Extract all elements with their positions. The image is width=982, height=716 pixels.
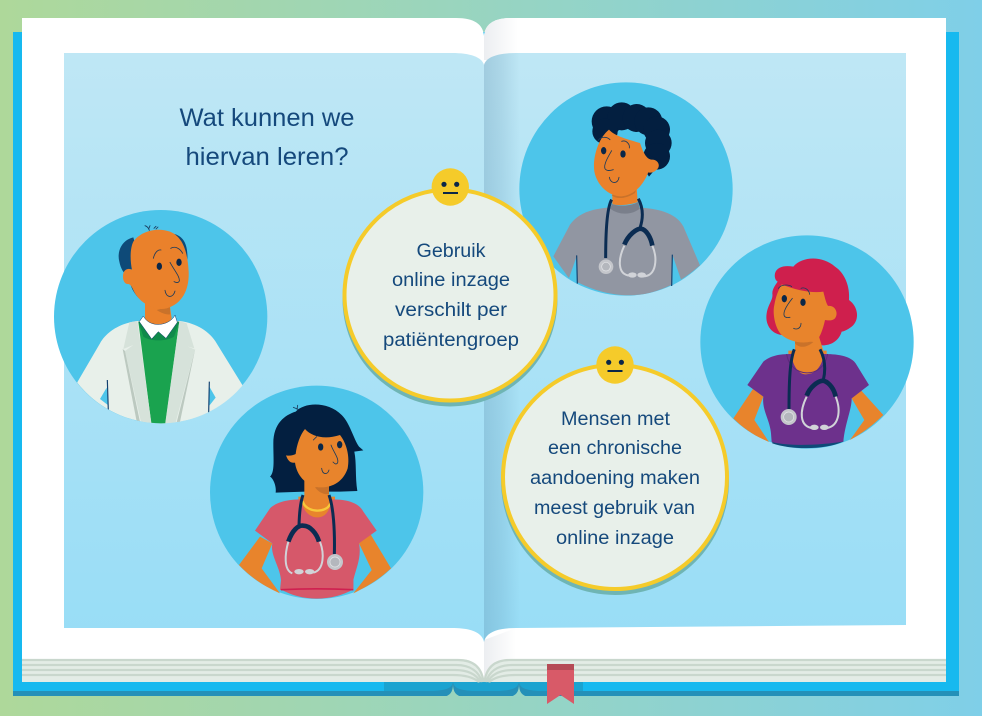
callout text: aandoening maken — [530, 468, 700, 489]
icon: neutral face — [596, 346, 634, 384]
title — [180, 104, 354, 171]
portrait: doctor in white coat — [54, 210, 267, 438]
callout text: Mensen met — [561, 409, 671, 430]
page stack right — [484, 659, 946, 682]
callout: gebruik online inzage — [342, 168, 558, 406]
callout text: online inzage — [556, 528, 674, 549]
callout text: verschilt per — [395, 300, 508, 321]
callout text: een chronische — [548, 438, 682, 459]
page content panel — [64, 53, 906, 642]
callout: mensen met een chronische aandoening — [501, 346, 729, 595]
callout text: patiëntengroep — [383, 330, 519, 351]
callout text: online inzage — [392, 270, 510, 291]
cover bottom edge — [13, 691, 959, 696]
bookmark — [547, 664, 574, 704]
callout text: meest gebruik van — [534, 498, 695, 519]
callout text — [530, 409, 700, 549]
page stack left — [22, 659, 484, 682]
spine — [384, 682, 583, 697]
right page spine shade top — [484, 18, 518, 60]
title: Wat kunnen we — [180, 104, 354, 132]
callout text — [383, 241, 519, 351]
icon: neutral face — [432, 168, 469, 206]
title: hiervan leren? — [186, 143, 348, 171]
portrait: nurse with red hair — [700, 235, 914, 449]
right page — [484, 18, 946, 682]
right page spine shade bottom — [484, 628, 516, 682]
left page — [22, 18, 484, 682]
callout text: Gebruik — [416, 241, 486, 262]
spine shadow — [484, 53, 520, 642]
portrait: nurse with black hair — [210, 386, 423, 599]
portrait: doctor with curly hair — [519, 82, 733, 296]
